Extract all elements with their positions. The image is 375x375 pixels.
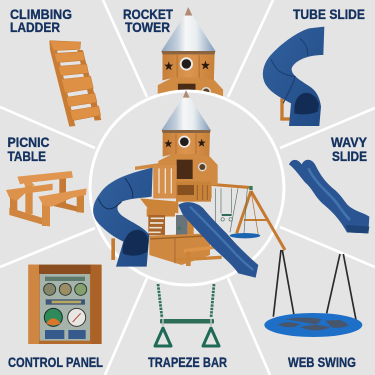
icon: wavy slide	[289, 160, 369, 233]
icon: picnic table	[6, 171, 87, 227]
icon: tube slide	[263, 27, 324, 126]
deck	[135, 161, 212, 198]
heading: web swing: WEB SWING	[288, 354, 356, 370]
icon: climbing ladder	[49, 41, 101, 127]
tube slide	[93, 168, 153, 267]
heading: picnic table: PICNIC	[8, 134, 50, 150]
heading: rocket tower: TOWER	[125, 19, 170, 35]
heading: wavy slide: WAVY	[331, 134, 368, 150]
icon: trapeze bar	[155, 284, 219, 346]
heading: trapeze bar: TRAPEZE BAR	[148, 354, 227, 370]
icon: rocket tower detail	[158, 7, 223, 112]
central circle	[90, 91, 284, 285]
heading: climbing ladder	[10, 6, 72, 35]
lower frame	[147, 208, 175, 217]
heading: tube slide: TUBE SLIDE	[293, 6, 365, 22]
tower	[158, 90, 218, 185]
swing frame	[211, 184, 285, 250]
heading: climbing ladder: LADDER	[10, 19, 60, 35]
heading: climbing ladder: CLIMBING	[10, 6, 72, 22]
main playset illustration	[93, 90, 285, 278]
icon: control panel	[28, 265, 102, 344]
heading: rocket tower	[123, 6, 173, 35]
heading: control panel: CONTROL PANEL	[8, 354, 103, 370]
heading: wavy slide: SLIDE	[332, 148, 367, 164]
icon: web swing	[264, 250, 362, 337]
heading: picnic table: TABLE	[8, 148, 46, 164]
straight slide	[178, 202, 258, 278]
heading: picnic table	[8, 134, 50, 164]
heading: wavy slide	[331, 134, 368, 164]
heading: rocket tower: ROCKET	[123, 6, 173, 22]
